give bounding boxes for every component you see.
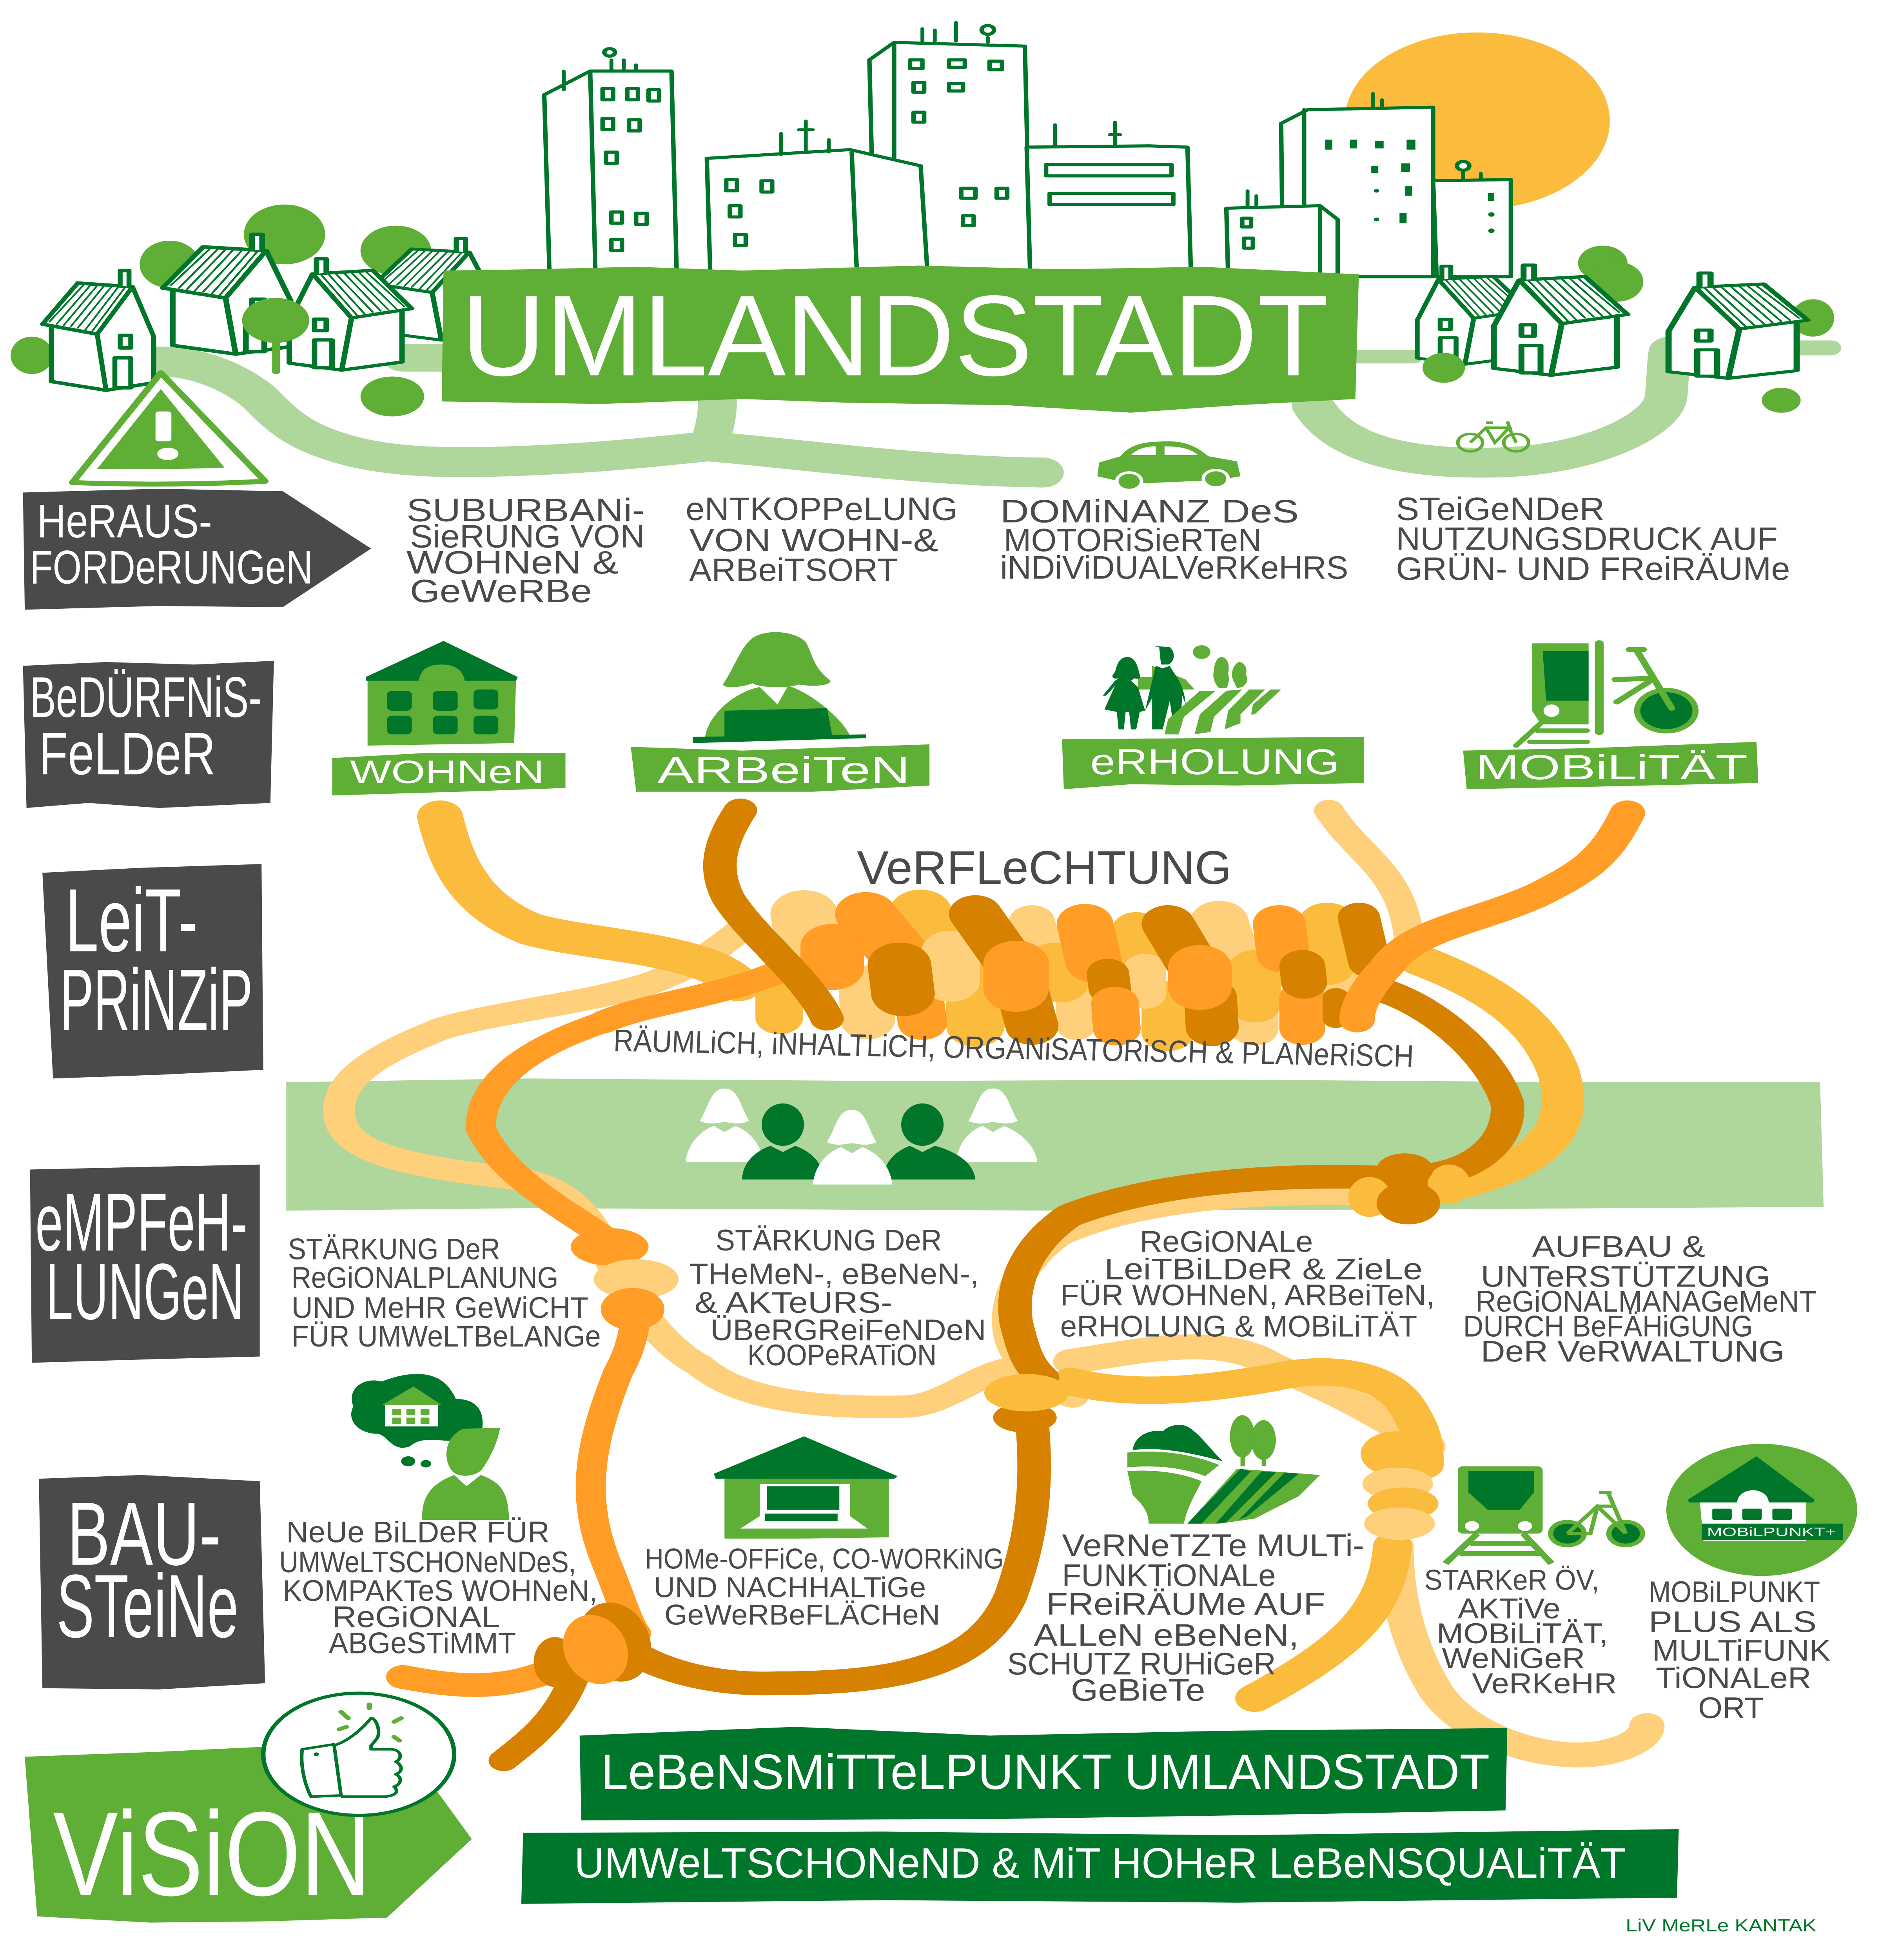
credit: LiV MeRLe KANTAK (1626, 1916, 1816, 1935)
icon: person thinking of a house (351, 1374, 509, 1520)
heading: Verflechtung: VeRFLeCHTUNG (857, 842, 1232, 894)
title text: UMLANDSTADT (461, 272, 1329, 400)
bike icon (1458, 421, 1528, 451)
text: Stärkung Kooperation: & AKTeURS- (695, 1286, 893, 1319)
rope: light strands (339, 810, 1647, 1755)
text: Entkoppelung: VON WOHN-& (689, 522, 938, 558)
text: Regionalmanagement: AUFBAU & (1532, 1230, 1705, 1263)
text: Regionale Leitbilder: ReGiONALe (1140, 1225, 1313, 1258)
panel: Empfehlungen (30, 1165, 1816, 1372)
building 1 (544, 49, 677, 277)
text: Regionale Leitbilder: FÜR WOHNeN, ARBeiTeN, (1060, 1278, 1435, 1312)
text: Stärkung Regionalplanung (288, 1232, 601, 1353)
text: Suburbanisierung: SUBURBANi- (406, 492, 645, 528)
icon: recreation people and field (1103, 645, 1281, 734)
text: starker ÖV: VeRKeHR (1472, 1668, 1617, 1700)
panel: Empfehlungen: eMPFeH- (35, 1176, 247, 1268)
text: starker ÖV (1424, 1564, 1617, 1700)
icon: person at laptop (693, 632, 866, 743)
text: Dominanz (1000, 494, 1348, 586)
text: Mobilpunkt plus (1649, 1575, 1831, 1724)
text: Nutzungsdruck (1396, 491, 1790, 587)
text: Stärkung Kooperation: KOOPeRATiON (748, 1338, 936, 1372)
icon: train and bike (1516, 643, 1695, 746)
text: neue Bilder (279, 1515, 597, 1660)
rope: yellow strands (1071, 960, 1563, 1698)
text: vernetzte Freiräume: ALLeN eBeNeN, (1034, 1618, 1299, 1653)
text: Mobilpunkt plus: ORT (1698, 1691, 1764, 1724)
houses left (42, 234, 492, 390)
heading arrow: Herausforderungen: FORDeRUNGeN (30, 541, 313, 594)
text: neue Bilder: ReGiONAL (332, 1600, 500, 1633)
text: Entkoppelung: ARBeiTSORT (689, 552, 898, 588)
sun (1345, 33, 1610, 209)
banner: Lebensmittelpunkt (580, 1727, 1507, 1820)
label: Erholung: eRHOLUNG (1090, 742, 1339, 782)
rope: orange strands (403, 1022, 636, 1685)
label: Mobilität: MOBiLiTÄT (1475, 748, 1747, 787)
heading: Bedürfnisfelder: BeDÜRFNiS- (30, 666, 261, 730)
text: Regionalmanagement (1463, 1230, 1816, 1368)
text: Nutzungsdruck: STeiGeNDeR (1396, 491, 1604, 527)
text: Regionale Leitbilder (1060, 1225, 1435, 1343)
icon: Mobilpunkt: MOBiLPUNKT+ (1707, 1525, 1836, 1539)
text: home-office: GeWeRBeFLÄCHeN (664, 1599, 940, 1631)
icon: train and bike (1446, 1466, 1642, 1564)
text: Entkoppelung (686, 491, 958, 588)
heading arrow: Herausforderungen: HeRAUS- (37, 495, 212, 548)
heading: Leitprinzip: LeiT- (65, 870, 198, 971)
banner: Lebensmittelpunkt: LeBeNSMiTTeLPUNKT UMLANDSTADT (601, 1744, 1490, 1800)
text: Stärkung Kooperation (689, 1223, 986, 1372)
rope: dark orange strands (504, 991, 1508, 1760)
icon: stakeholders group (686, 1089, 1037, 1185)
skyline buildings (544, 22, 1511, 277)
text: Dominanz: DOMiNANZ DeS (1000, 494, 1299, 530)
roads (159, 348, 1831, 472)
text: starker ÖV: STARKeR ÖV, (1424, 1564, 1599, 1596)
text: Regionalmanagement: UNTeRSTÜTZUNG (1481, 1259, 1771, 1293)
knot: left (571, 1228, 679, 1330)
text: Mobilpunkt plus: TiONALeR (1656, 1661, 1811, 1695)
warning triangle icon (73, 373, 265, 484)
panel: Bedürfnisfelder (23, 632, 1758, 808)
text: Dominanz: MOTORiSieRTeN (1004, 522, 1262, 558)
panel: Bausteine (39, 1374, 1857, 1724)
text: Stärkung Regionalplanung: ReGiONALPLANUNG (292, 1261, 559, 1294)
building 2 (869, 22, 1030, 277)
title banner (442, 265, 1359, 413)
text: Regionalmanagement: DeR VeRWALTUNG (1481, 1334, 1785, 1368)
label: Erholung (1062, 737, 1364, 789)
text: neue Bilder: ABGeSTiMMT (328, 1626, 516, 1660)
heading: Empfehlungen (30, 1165, 260, 1363)
text: Mobilpunkt plus: PLUS ALS (1649, 1605, 1816, 1639)
heading: Bedürfnisfelder: FeLDeR (39, 720, 216, 787)
text: räumlich, inhaltlich, organisatorisch, planerisch: RÄUMLiCH, iNHALTLiCH, ORGANiSATORiSCH & PLANeRiSCH (613, 1023, 1414, 1074)
text: Regionalmanagement: DURCH BeFÄHiGUNG (1463, 1309, 1753, 1343)
panel: Herausforderungen (23, 489, 1790, 610)
heading arrow: Vision (25, 1747, 472, 1923)
text: home-office (645, 1543, 1004, 1631)
text: vernetzte Freiräume: GeBieTe (1071, 1673, 1205, 1708)
text: vernetzte Freiräume: SCHUTZ RUHiGeR (1007, 1646, 1276, 1681)
text: Suburbanisierung: GeWeRBe (410, 573, 592, 609)
text: Stärkung Kooperation: THeMeN-, eBeNeN-, (689, 1257, 979, 1290)
heading: Bausteine: BAU- (67, 1484, 221, 1584)
text: Stärkung Regionalplanung: UND MeHR GeWiCHT (292, 1291, 588, 1324)
label: Wohnen: WOHNeN (350, 754, 544, 790)
heading arrow: Vision: ViSiON (53, 1787, 371, 1921)
heading: Bedürfnisfelder (23, 661, 274, 808)
text: Dominanz: iNDiViDUALVeRKeHRS (1000, 550, 1348, 586)
text: vernetzte Freiräume: VeRNeTZTe MULTi- (1062, 1528, 1364, 1563)
text: starker ÖV: AKTiVe (1458, 1593, 1561, 1625)
car icon (1097, 441, 1241, 490)
text: Stärkung Regionalplanung: STÄRKUNG DeR (288, 1232, 500, 1266)
text: Stärkung Kooperation: ÜBeRGReiFeNDeN (710, 1313, 986, 1347)
knot: bottom left (533, 1599, 660, 1688)
icon: Mobilpunkt (1666, 1444, 1857, 1576)
text: Regionale Leitbilder: eRHOLUNG & MOBiLiTÄT (1060, 1309, 1417, 1343)
panel: Empfehlungen: LUNGeN (46, 1247, 244, 1336)
text: vernetzte Freiräume: FReiRÄUMe AUF (1046, 1586, 1325, 1621)
knot: central braid (779, 911, 1370, 1033)
heading: Bausteine (39, 1475, 265, 1690)
text: PRiNZiP (60, 951, 253, 1049)
rope network (339, 810, 1647, 1760)
building 7 (1227, 191, 1338, 277)
text: Stärkung Kooperation: STÄRKUNG DeR (716, 1223, 942, 1257)
icon: thumbs up (263, 1693, 454, 1815)
text: vernetzte Freiräume (1007, 1528, 1364, 1708)
text: Suburbanisierung: SieRUNG VON (410, 518, 645, 554)
heading: Leitprinzip (42, 864, 263, 1078)
text: neue Bilder: NeUe BiLDeR FÜR (286, 1515, 550, 1549)
text: Suburbanisierung: WOHNeN & (406, 544, 619, 581)
building 3 (707, 121, 928, 277)
building 6 (1433, 162, 1511, 277)
rope: strands over braid (440, 810, 1628, 1022)
banner: umweltschonend (521, 1829, 1679, 1904)
knot: right (1348, 1153, 1470, 1224)
panel: Vision (25, 1693, 1816, 1935)
text: Mobilpunkt plus: MULTiFUNK (1652, 1633, 1831, 1667)
text: neue Bilder: KOMPAKTeS WOHNeN, (283, 1574, 597, 1607)
building 5 (1281, 94, 1433, 277)
text: home-office: UND NACHHALTiGe (654, 1572, 926, 1604)
text: Stärkung Regionalplanung: FÜR UMWeLTBeLANGe (292, 1319, 601, 1353)
text: Regionale Leitbilder: LeiTBiLDeR & ZieLe (1104, 1252, 1423, 1286)
knot: centre (984, 1374, 1069, 1433)
text: starker ÖV: WeNiGeR (1442, 1643, 1585, 1675)
icon: landscape with trees (1127, 1415, 1320, 1524)
heading: Bausteine: STeiNe (56, 1556, 239, 1656)
houses right (1417, 265, 1808, 378)
text: starker ÖV: MOBiLiTÄT, (1437, 1618, 1608, 1650)
icon: house Wohnen (366, 641, 518, 746)
band: stakeholders background (286, 1078, 1824, 1210)
text: home-office: HOMe-OFFiCe, CO-WORKiNG (645, 1543, 1004, 1575)
knot: right braid (1361, 1431, 1438, 1540)
building 4 (1027, 122, 1191, 277)
label: Arbeiten: ARBeiTeN (657, 749, 910, 791)
text: Suburbanisierung (406, 492, 645, 609)
heading arrow: Herausforderungen (23, 489, 371, 610)
trees behind houses (11, 205, 1834, 374)
text: neue Bilder: UMWeLTSCHONeNDeS, (279, 1545, 576, 1579)
trees in front of houses (242, 298, 1801, 416)
text: Entkoppelung: eNTKOPPeLUNG (686, 491, 958, 527)
text: vernetzte Freiräume: FUNKTiONALe (1062, 1558, 1276, 1593)
icon: house with laptop (714, 1436, 898, 1539)
